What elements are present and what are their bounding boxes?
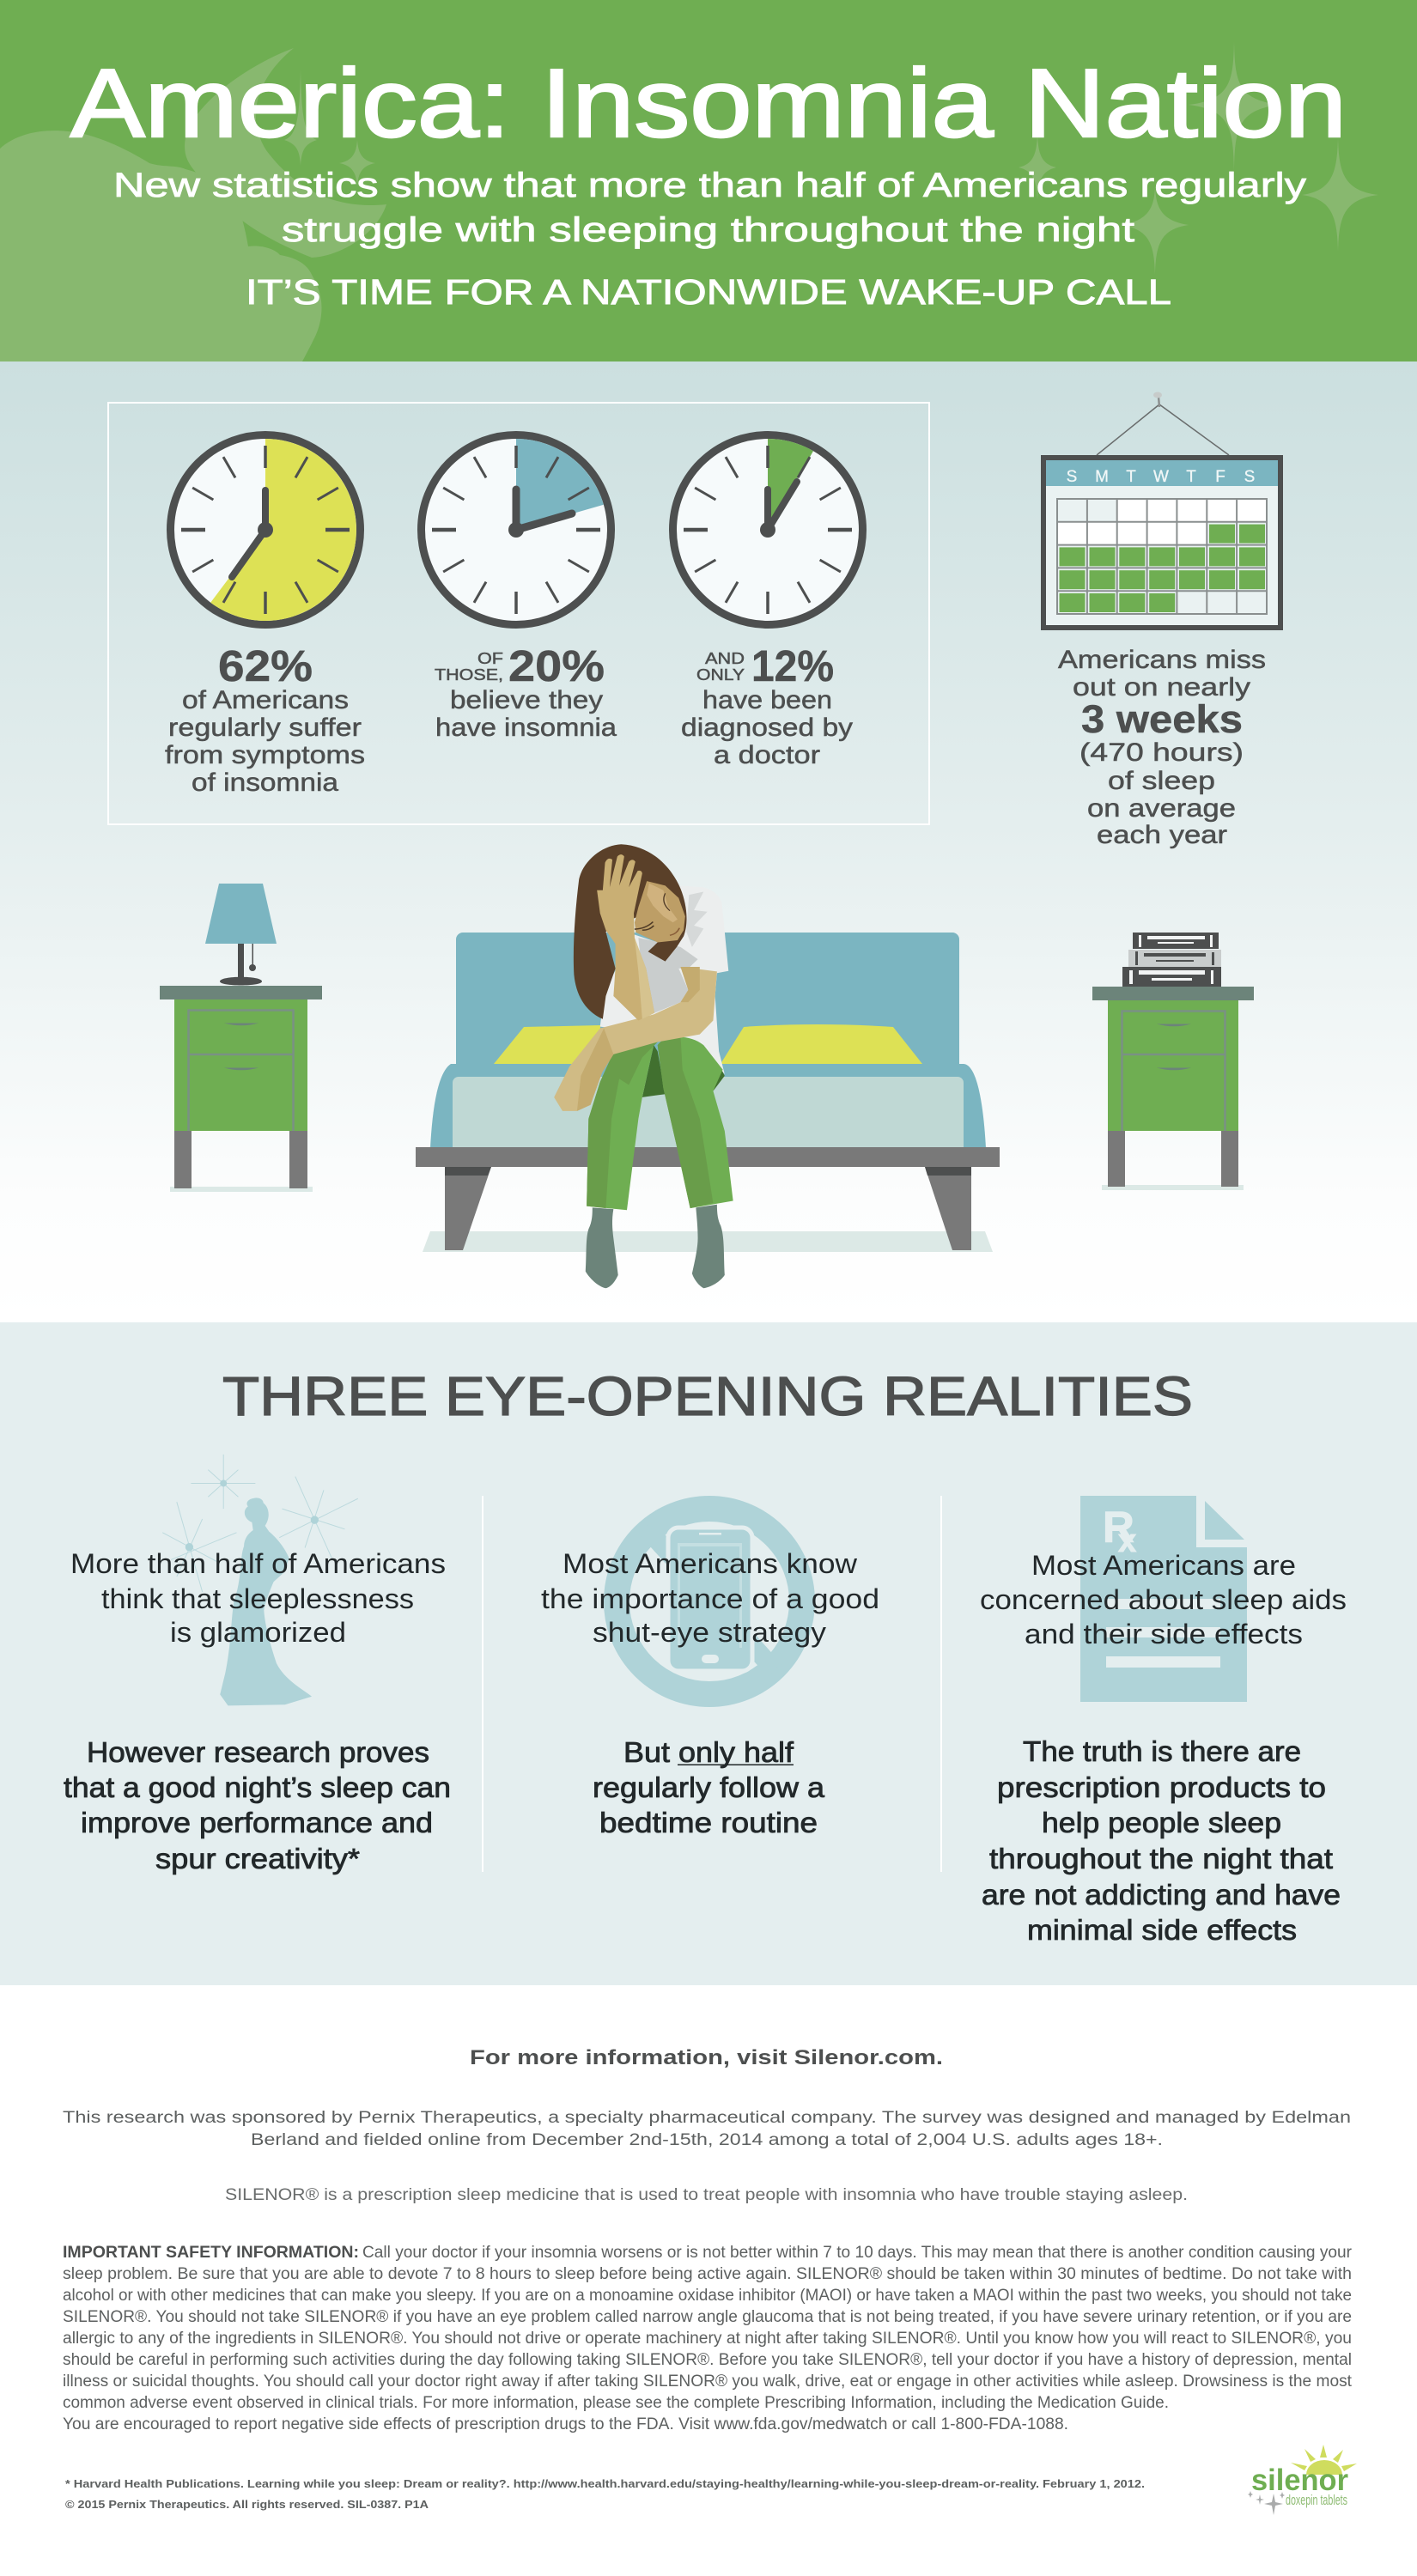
lead: shut-eye strategy: shut-eye strategy [593, 1617, 826, 1648]
conclusion: research: improve performance and [81, 1807, 433, 1838]
stat text: 62%: of insomnia [192, 769, 338, 797]
text: important safety information: common adverse event observed in clinical trials. For more information, please see the complete Prescribing Information, including the Medication Guide. [63, 2394, 1169, 2412]
text: important safety information: You are encouraged to report negative side effects of prescription drugs to the FDA. Visit www.fda.gov/medwatch or call 1-800-FDA-1088. [63, 2415, 1068, 2433]
lead: glamorized: is glamorized [170, 1617, 346, 1648]
stat text: 20%: 20% [508, 641, 605, 690]
stat text: 12%: ONLY [696, 666, 745, 683]
icon: glamorous woman silhouette with stars [162, 1455, 358, 1705]
icon: crescent moon and cloud [0, 48, 386, 361]
text: product description: SILENOR® is a prescription sleep medicine that is used to treat people with insomnia who have trouble staying asleep. [225, 2186, 1188, 2204]
text: footnote and copyright: © 2015 Pernix Therapeutics. All rights reserved. SIL-0387. P1A [65, 2498, 429, 2511]
icon: rising sun [1291, 2445, 1357, 2475]
lead: glamorized: More than half of Americans [70, 1548, 446, 1579]
icon: prescription document: R [1103, 1503, 1134, 1552]
weekday header: T [1186, 468, 1196, 486]
conclusion: research: that a good night’s sleep can [64, 1771, 451, 1803]
illustration: left nightstand with lamp [160, 884, 322, 1192]
column 2 text [541, 1548, 879, 1838]
stat text: 12% [681, 641, 853, 769]
text: important safety information: IMPORTANT SAFETY INFORMATION: [63, 2244, 359, 2262]
text: research sponsorship: This research was sponsored by Pernix Therapeutics, a specialty pharmaceutical company. The survey was designed and managed by Edelman [63, 2109, 1351, 2127]
text: research sponsorship [63, 2109, 1351, 2149]
illustration: woman sitting awake on bed [554, 844, 733, 1288]
text: important safety information: alcohol or with other medicines that can make you sleepy. If you are on a monoamine oxidase inhibitor (MAOI) or have taken a MAOI within the past two weeks, you should not take [63, 2287, 1352, 2305]
illustration: right nightstand with books [1092, 933, 1254, 1190]
icon: wall calendar [1043, 392, 1280, 628]
stat text: 12%: a doctor [714, 741, 820, 769]
column 1 text [64, 1548, 451, 1874]
text: important safety information: allergic to any of the ingredients in SILENOR®. You should not drive or operate machinery at night after taking SILENOR®. Until you know how you will react to SILENOR®, you [63, 2330, 1352, 2348]
weekday header: T [1126, 468, 1136, 486]
subtitle: New statistics show that more than half of Americans regularly [113, 167, 1306, 204]
panel: statistics box [108, 403, 929, 824]
conclusion: prescription products: minimal side effects [1027, 1914, 1297, 1946]
conclusion: only half: regularly follow a [593, 1771, 825, 1803]
stat text: 20%: have insomnia [435, 714, 617, 742]
subtitle: struggle with sleeping throughout the night [282, 211, 1134, 249]
pants [587, 1036, 733, 1210]
panel: green header [0, 0, 1417, 361]
conclusion: research: However research proves [87, 1736, 429, 1768]
stat text: 62%: from symptoms [165, 741, 365, 769]
conclusion: prescription products [982, 1735, 1341, 1946]
text: three weeks of sleep [1058, 646, 1266, 849]
clock: 12% [673, 434, 862, 625]
lead: side effects: and their side effects [1025, 1619, 1303, 1649]
panel: three eye-opening realities [0, 1322, 1417, 1985]
conclusion: prescription products: help people sleep [1042, 1807, 1281, 1838]
text: important safety information: illness or suicidal thoughts. You should call your doctor right away if after taking SILENOR® you walk, drive, eat or engage in other activities while asleep. Drowsiness is the most [63, 2372, 1353, 2391]
weekday header: M [1095, 468, 1109, 486]
text: three weeks of sleep: (470 hours) [1079, 738, 1244, 767]
stat text: 20%: OF [477, 650, 503, 667]
text: important safety information: SILENOR®. You should not take SILENOR® if you have an eye problem called narrow angle glaucoma that is not being treated, if you have severe urinary retention, or if you are [63, 2308, 1352, 2326]
logo: silenor: silenor [1251, 2464, 1348, 2497]
stat text: 62%: of Americans [182, 686, 349, 714]
weekday header: S [1067, 468, 1077, 486]
stat text: 62%: 62% [218, 641, 313, 690]
lead: shut-eye strategy [541, 1548, 879, 1648]
text: three weeks of sleep: Americans miss [1058, 646, 1266, 674]
stat text: 20% [435, 641, 617, 742]
text: important safety information: should be careful in performing such activities during the day following taking SILENOR®. Before you take SILENOR®, tell your doctor if you have a history of depression, mental [63, 2351, 1352, 2369]
stat text: 12%: 12% [751, 641, 834, 690]
conclusion: prescription products: are not addicting and have [982, 1879, 1341, 1911]
weekday header [1046, 460, 1278, 486]
lead: glamorized: think that sleeplessness [101, 1583, 414, 1614]
conclusion: prescription products: The truth is there are [1023, 1735, 1301, 1767]
text: important safety information: Call your doctor if your insomnia worsens or is not better within 7 to 10 days. This may mean that there is another condition causing your [362, 2244, 1353, 2262]
conclusion: only half: But only half [623, 1736, 794, 1768]
conclusion: only half: bedtime routine [599, 1807, 818, 1838]
text: three weeks of sleep: out on nearly [1073, 673, 1250, 702]
lead: glamorized [70, 1548, 446, 1648]
icon: prescription document [1080, 1496, 1247, 1702]
stat text: 62%: regularly suffer [168, 714, 362, 742]
weekday header: F [1215, 468, 1225, 486]
conclusion: prescription products: throughout the night that [989, 1843, 1333, 1874]
lead: side effects: concerned about sleep aids [980, 1584, 1347, 1615]
stat text: 12%: diagnosed by [681, 714, 853, 742]
text: footnote and copyright: * Harvard Health Publications. Learning while you sleep: Dream or reality?. http://www.health.harvard.edu/staying-healthy/learning-while-you-sleep-dream-or-reality. February 1, 2012. [65, 2477, 1145, 2490]
lead: shut-eye strategy: Most Americans know [563, 1548, 858, 1579]
tagline: IT’S TIME FOR A NATIONWIDE WAKE-UP CALL [246, 272, 1171, 312]
logo: silenor [1248, 2445, 1357, 2515]
stat text: 20%: believe they [450, 686, 603, 714]
divider [482, 1496, 483, 1872]
conclusion: prescription products: prescription products to [997, 1771, 1326, 1803]
face [635, 881, 685, 942]
heading: THREE EYE-OPENING REALITIES [222, 1365, 1193, 1427]
text: more information: For more information, visit Silenor.com. [470, 2046, 943, 2069]
text: important safety information: sleep problem. Be sure that you are able to devote 7 to 8 hours to sleep before being active again. SILENOR® should be taken within 30 minutes of bedtime. Do not take with [63, 2265, 1352, 2283]
text: important safety information [63, 2244, 1353, 2433]
icon: prescription document: x [1118, 1523, 1136, 1559]
clock: 20% [421, 434, 611, 625]
icon: lamp [205, 884, 277, 986]
text: three weeks of sleep: each year [1097, 821, 1227, 849]
column 3 text [980, 1550, 1347, 1946]
socks [586, 1205, 725, 1288]
text: footnote and copyright [65, 2477, 1145, 2511]
panel: sky gradient background [0, 361, 1417, 1322]
weekday header: W [1153, 468, 1169, 486]
lead: shut-eye strategy: the importance of a good [541, 1583, 879, 1614]
raised arm and hand [597, 854, 654, 1021]
text: research sponsorship: Berland and fielded online from December 2nd-15th, 2014 among a total of 2,004 U.S. adults ages 18+. [251, 2131, 1163, 2149]
icon: sparkles [284, 41, 1378, 275]
text: three weeks of sleep: of sleep [1108, 767, 1215, 795]
resting arm and hand [554, 967, 717, 1111]
clock: 62% [170, 434, 361, 625]
conclusion: research: spur creativity* [155, 1843, 360, 1874]
icon: stack of books [1122, 933, 1221, 987]
title: America: Insomnia Nation [70, 49, 1347, 157]
stat text: 12%: have been [702, 686, 832, 714]
shirt [600, 885, 728, 1074]
divider [940, 1496, 942, 1872]
stat text: 12%: AND [705, 650, 745, 667]
weekday header: S [1244, 468, 1255, 486]
text: three weeks of sleep: 3 weeks [1081, 697, 1243, 741]
subtitle [113, 167, 1306, 249]
day grid: shaded days missed [1057, 499, 1267, 614]
text: three weeks of sleep: on average [1087, 794, 1236, 823]
conclusion: only half [593, 1736, 825, 1838]
illustration: bed [416, 933, 1000, 1252]
conclusion: research [64, 1736, 451, 1874]
lead: side effects [980, 1550, 1347, 1649]
nail and hanging string [1097, 392, 1229, 455]
stat text: 20%: THOSE, [435, 666, 503, 683]
icon: no phones [617, 1509, 802, 1694]
logo: silenor: doxepin tablets [1286, 2492, 1347, 2508]
hair [574, 844, 687, 1019]
icon: silver sparkles [1248, 2491, 1285, 2515]
stat text: 62% [165, 641, 365, 797]
lead: side effects: Most Americans are [1031, 1550, 1296, 1581]
